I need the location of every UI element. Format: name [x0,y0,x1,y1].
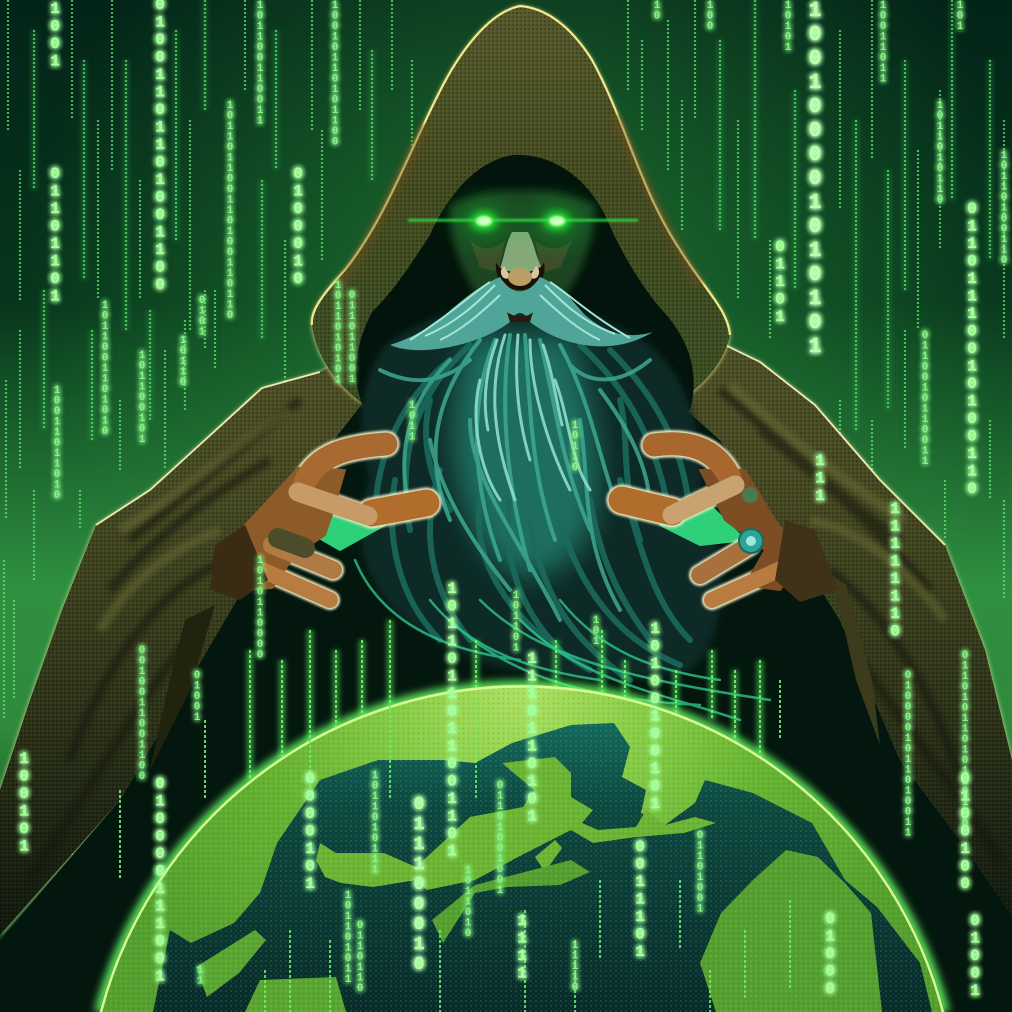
foreground binary columns: 0011101 [631,838,649,960]
moustache [390,277,653,350]
foreground binary columns: 10100100101 [646,620,664,812]
background binary columns: 0101 [196,295,208,337]
background binary columns: 01101101 [46,165,64,305]
hood opening [356,155,694,410]
glowing eyes [408,203,638,239]
background binary columns: 101100101 [136,350,148,444]
sleeve folds [30,390,1000,880]
face [408,190,638,312]
foreground binary columns: 01101001001 [494,780,506,896]
palm [700,470,805,590]
left hand [210,444,426,600]
foreground binary columns: 100101 [15,750,33,855]
foreground binary columns: 1010110000 [254,555,266,660]
oceans [153,723,932,1012]
foreground binary columns: 01101001 [694,830,706,914]
right hand [622,444,838,602]
background binary columns: 10010110101100 [329,0,341,147]
foreground binary columns: 01000 [821,910,839,998]
background binary columns: 1001 [46,0,64,70]
background binary columns: 100 [704,0,716,32]
green glow webbing [300,505,385,550]
foreground binary columns: 101101011 [342,890,354,984]
robe body [0,330,1012,1012]
foreground binary columns: 11111110 [886,500,904,640]
robe rim light [96,345,945,545]
hood edge shading [340,115,700,285]
background binary columns: 0110010110011 [919,330,931,466]
background binary columns: 1011010110 [934,100,946,205]
foreground binary columns: 0100100 [956,770,974,892]
foreground binary columns: 0110110 [354,920,366,994]
background binary columns: 01101 [771,238,789,326]
continents [196,757,882,1012]
foreground binary columns: 01001 [191,670,203,722]
background binary columns: 1011001101010 [99,300,111,436]
background binary columns: 101 [954,0,966,32]
hood rim light [312,6,730,335]
patterned cuff [210,525,268,600]
background binary columns: 10110 [177,335,189,388]
foreground binary columns: 0000101 [301,770,319,892]
background binary columns: 10011011010 [51,385,63,500]
foreground thin code rain [265,700,790,1012]
globe [94,680,950,1012]
beard core shading [452,335,598,576]
background binary columns: 10 [651,0,663,21]
foreground binary columns: 1011010101 [332,280,344,385]
ornate rings [739,529,763,553]
dark interior behind the figure [0,395,1012,1012]
mid strands [380,335,650,620]
palm [235,468,345,590]
foreground binary columns: 1011011011001101 [443,580,461,860]
foreground binary columns: 011011001 [346,290,358,384]
foreground binary columns: 010000111001 [151,775,169,985]
foreground binary columns: 01101011010110110 [959,650,971,828]
hand outline [622,444,785,600]
foreground binary columns: 101 [590,615,602,646]
patterned cuff [775,520,838,602]
green wisps [355,560,770,720]
hand outline [262,444,426,600]
dark ring [278,538,305,548]
background binary columns: 0100010 [289,165,307,288]
background binary columns: 01001101101001100 [151,0,169,294]
foreground binary columns: 1011010111 [369,770,381,875]
streaks above the globe [120,620,780,880]
foreground binary columns: 0010011001100 [136,645,148,782]
dark strands [375,345,690,680]
foreground binary columns: 1110110101 [523,650,541,825]
foreground binary columns: 1011010 [462,865,474,938]
foreground binary columns: 1011 [406,400,418,442]
background binary columns: 10110100110 [998,150,1010,266]
foreground binary columns [15,280,984,1000]
sleeve trims [150,605,215,770]
foreground binary columns: 0100001011010011 [902,670,914,838]
moustache strands [410,282,630,340]
foreground binary columns: 11110 [569,940,581,992]
background binary columns: 101101100110100110110 [224,100,236,320]
foreground binary columns: 111 [811,452,829,504]
background binary columns: 10011011 [877,0,889,84]
foreground binary columns: 1111 [513,912,531,982]
foreground binary columns: 01001 [966,912,984,1000]
green glow webbing [660,505,745,545]
bright strands [476,335,590,500]
fingers [654,444,730,478]
sleeve highlights [100,385,945,630]
background binary columns: 10101 [782,0,794,52]
beard [355,277,770,720]
fingers [305,444,386,482]
background binary columns: 01101110010100110 [963,200,981,498]
foreground binary columns: 011100010 [409,795,429,975]
foreground binary columns: 101101 [510,590,522,653]
hood [312,6,730,410]
background binary columns: 101100110011 [254,0,266,126]
background binary columns [46,0,1010,500]
foreground binary columns: 10110 [569,420,581,472]
foreground binary columns: 11 [194,965,206,986]
background binary columns: 100100001010101 [804,0,826,360]
